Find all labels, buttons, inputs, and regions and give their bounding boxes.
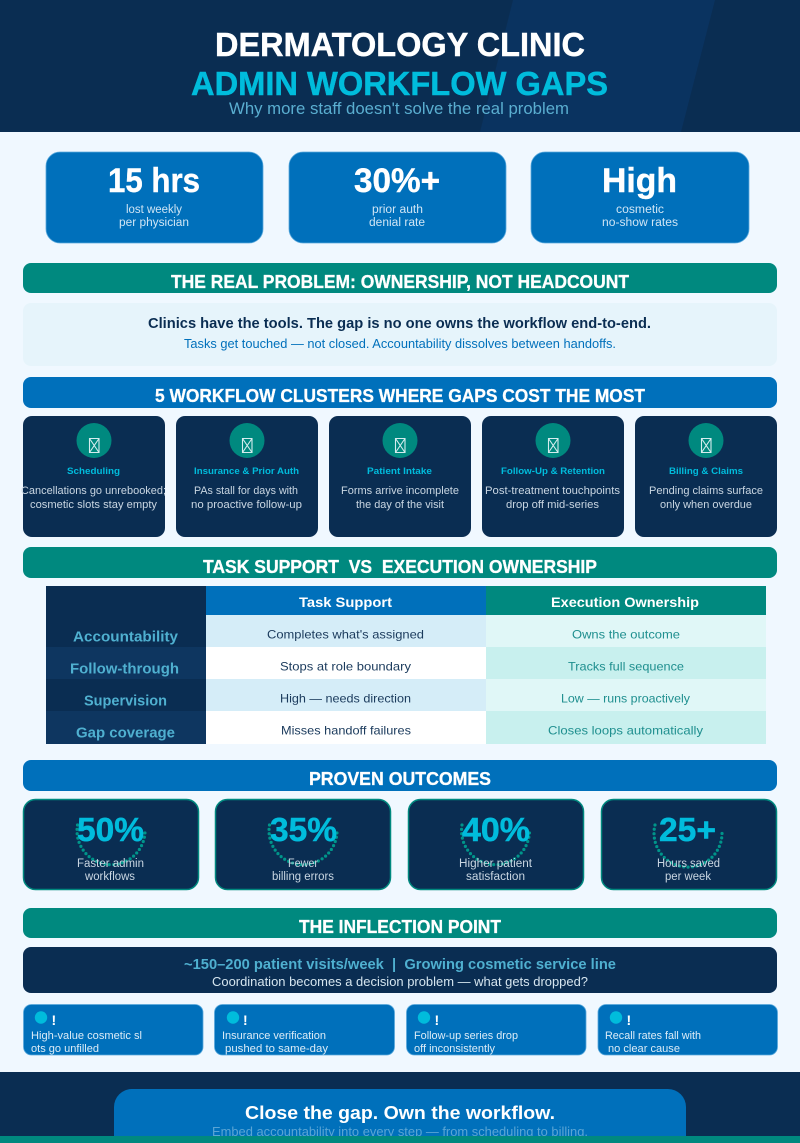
card: billing and claims (635, 416, 777, 537)
title line 2: ADMIN WORKFLOW GAPS (191, 65, 608, 102)
panel: inflection point statement: Coordination becomes a decision problem — what gets dropped? (212, 975, 588, 989)
warning: cosmetic slots: High-value cosmetic sl (31, 1030, 142, 1042)
warning: cosmetic slots: ! (52, 1012, 56, 1028)
card: scheduling: cosmetic slots stay empty (30, 499, 158, 511)
outcome: 50% (24, 800, 198, 890)
card: follow-up and retention (482, 416, 624, 537)
comparison table (46, 586, 766, 744)
execution ownership column: Closes loops automatically (548, 724, 703, 738)
section bar: workflow clusters (23, 377, 777, 408)
execution ownership column: Tracks full sequence (568, 660, 684, 674)
outcome: 35%: Fewer (288, 858, 318, 870)
stat: High (531, 152, 749, 243)
card: insurance and prior auth: Insurance & Prior Auth (194, 466, 299, 477)
outcome: 35% (216, 800, 390, 890)
card: follow-up and retention: Follow-Up & Retention (501, 466, 605, 477)
warning: insurance verification: pushed to same-day (225, 1043, 329, 1055)
card: patient intake (329, 416, 471, 537)
stat cards (46, 152, 749, 243)
card: billing and claims: Pending claims surface (649, 485, 763, 497)
card: billing and claims: Billing & Claims (669, 466, 743, 477)
section bar: task support vs execution ownership: TASK SUPPORT VS EXECUTION OWNERSHIP (203, 557, 597, 577)
panel: inflection point statement: ~150–200 patient visits/week | Growing cosmetic service line (184, 957, 616, 973)
task support column: High — needs direction (280, 692, 411, 706)
warning: insurance verification (214, 1004, 394, 1055)
title line 1: DERMATOLOGY CLINIC (215, 26, 585, 63)
stat: High: High (602, 162, 677, 200)
stat: 30%+: denial rate (369, 217, 425, 229)
card: scheduling: Cancellations go unrebooked; (21, 485, 166, 497)
outcome: 25+: per week (665, 871, 711, 883)
warning: follow-up series: ! (434, 1012, 439, 1028)
card: follow-up and retention: drop off mid-series (506, 499, 600, 511)
warning cards (24, 1004, 778, 1055)
outcome: 25+: 25+ (659, 811, 716, 848)
column headers (299, 594, 699, 610)
warning: follow-up series: Follow-up series drop (414, 1030, 518, 1042)
warning: insurance verification: ! (243, 1012, 248, 1028)
outcome: 50%: workflows (84, 871, 135, 883)
section bar: the real problem (23, 263, 777, 293)
column headers: Task Support (299, 594, 392, 610)
row labels: Follow-through (70, 662, 179, 678)
warning: recall rates (598, 1004, 778, 1055)
card: scheduling: Scheduling (67, 466, 120, 477)
section bar: task support vs execution ownership (23, 547, 777, 578)
task support column: Misses handoff failures (281, 724, 411, 738)
execution ownership column: Owns the outcome (572, 628, 680, 642)
warning: follow-up series: off inconsistently (414, 1043, 495, 1055)
subtitle: Why more staff doesn't solve the real problem (229, 100, 569, 118)
call to action panel: Embed accountability into every step — from scheduling to billing. (212, 1125, 588, 1139)
card: follow-up and retention: Post-treatment touchpoints (485, 485, 621, 497)
card: insurance and prior auth: no proactive follow-up (191, 499, 302, 511)
warning: recall rates: Recall rates fall with (605, 1030, 701, 1042)
warning: cosmetic slots (24, 1004, 203, 1055)
execution ownership column (548, 628, 703, 738)
task support column (267, 628, 424, 738)
section bar: the inflection point (23, 908, 777, 938)
warning: insurance verification: Insurance verification (222, 1030, 326, 1042)
warning: cosmetic slots: ots go unfilled (31, 1043, 99, 1055)
outcome: 40% (408, 800, 584, 890)
card: patient intake: the day of the visit (356, 499, 444, 511)
stat: 15 hrs (46, 152, 263, 243)
card: scheduling (21, 416, 166, 537)
warning: recall rates: no clear cause (608, 1043, 680, 1055)
outcome: 35%: billing errors (272, 871, 334, 883)
panel: inflection point statement (23, 947, 777, 993)
outcome: 35%: 35% (270, 811, 337, 848)
stat: 30%+: prior auth (372, 204, 423, 216)
card: patient intake: Forms arrive incomplete (341, 485, 459, 497)
panel: problem statement (23, 303, 777, 366)
panel: problem statement: Clinics have the tools. The gap is no one owns the workflow end-to-end. (148, 316, 651, 332)
outcome: 50%: 50% (77, 811, 144, 848)
card: insurance and prior auth: PAs stall for days with (194, 485, 298, 497)
row labels: Accountability (73, 630, 178, 646)
panel: problem statement: Tasks get touched — not closed. Accountability dissolves between handoffs. (184, 337, 616, 351)
execution ownership column: Low — runs proactively (561, 692, 690, 706)
call to action panel: Close the gap. Own the workflow. (245, 1102, 555, 1123)
outcome: 25+ (602, 800, 776, 890)
stat: 30%+: 30%+ (354, 162, 440, 200)
footer (0, 1072, 800, 1143)
section bar: proven outcomes (23, 760, 777, 791)
row labels (70, 630, 179, 742)
section bar: workflow clusters: 5 WORKFLOW CLUSTERS WHERE GAPS COST THE MOST (155, 386, 645, 406)
stat: 15 hrs: 15 hrs (108, 162, 200, 200)
section bar: the real problem: THE REAL PROBLEM: OWNERSHIP, NOT HEADCOUNT (171, 272, 629, 292)
task support column: Completes what's assigned (267, 628, 424, 642)
workflow cluster cards (21, 416, 777, 537)
stat: 15 hrs: per physician (119, 217, 189, 229)
header banner (0, 0, 800, 132)
stat: 15 hrs: lost weekly (126, 204, 182, 216)
card: billing and claims: only when overdue (660, 499, 752, 511)
warning: recall rates: ! (626, 1012, 631, 1028)
outcome: 50%: Faster admin (77, 858, 144, 870)
call to action panel (114, 1089, 686, 1143)
stat: High: no-show rates (602, 217, 678, 229)
task support column: Stops at role boundary (280, 660, 411, 674)
section bar: the inflection point: THE INFLECTION POINT (299, 917, 501, 937)
column headers: Execution Ownership (551, 594, 699, 610)
outcome cards (24, 800, 776, 890)
stat: High: cosmetic (616, 204, 664, 216)
outcome: 40%: 40% (462, 811, 530, 848)
warning: follow-up series (406, 1004, 586, 1055)
outcome: 25+: Hours saved (657, 858, 720, 870)
outcome: 40%: satisfaction (466, 871, 525, 883)
section bar: proven outcomes: PROVEN OUTCOMES (309, 769, 491, 789)
row labels: Gap coverage (76, 726, 175, 742)
stat: 30%+ (289, 152, 506, 243)
row labels: Supervision (84, 694, 167, 710)
card: insurance and prior auth (176, 416, 318, 537)
card: patient intake: Patient Intake (367, 466, 432, 477)
outcome: 40%: Higher patient (459, 858, 533, 870)
